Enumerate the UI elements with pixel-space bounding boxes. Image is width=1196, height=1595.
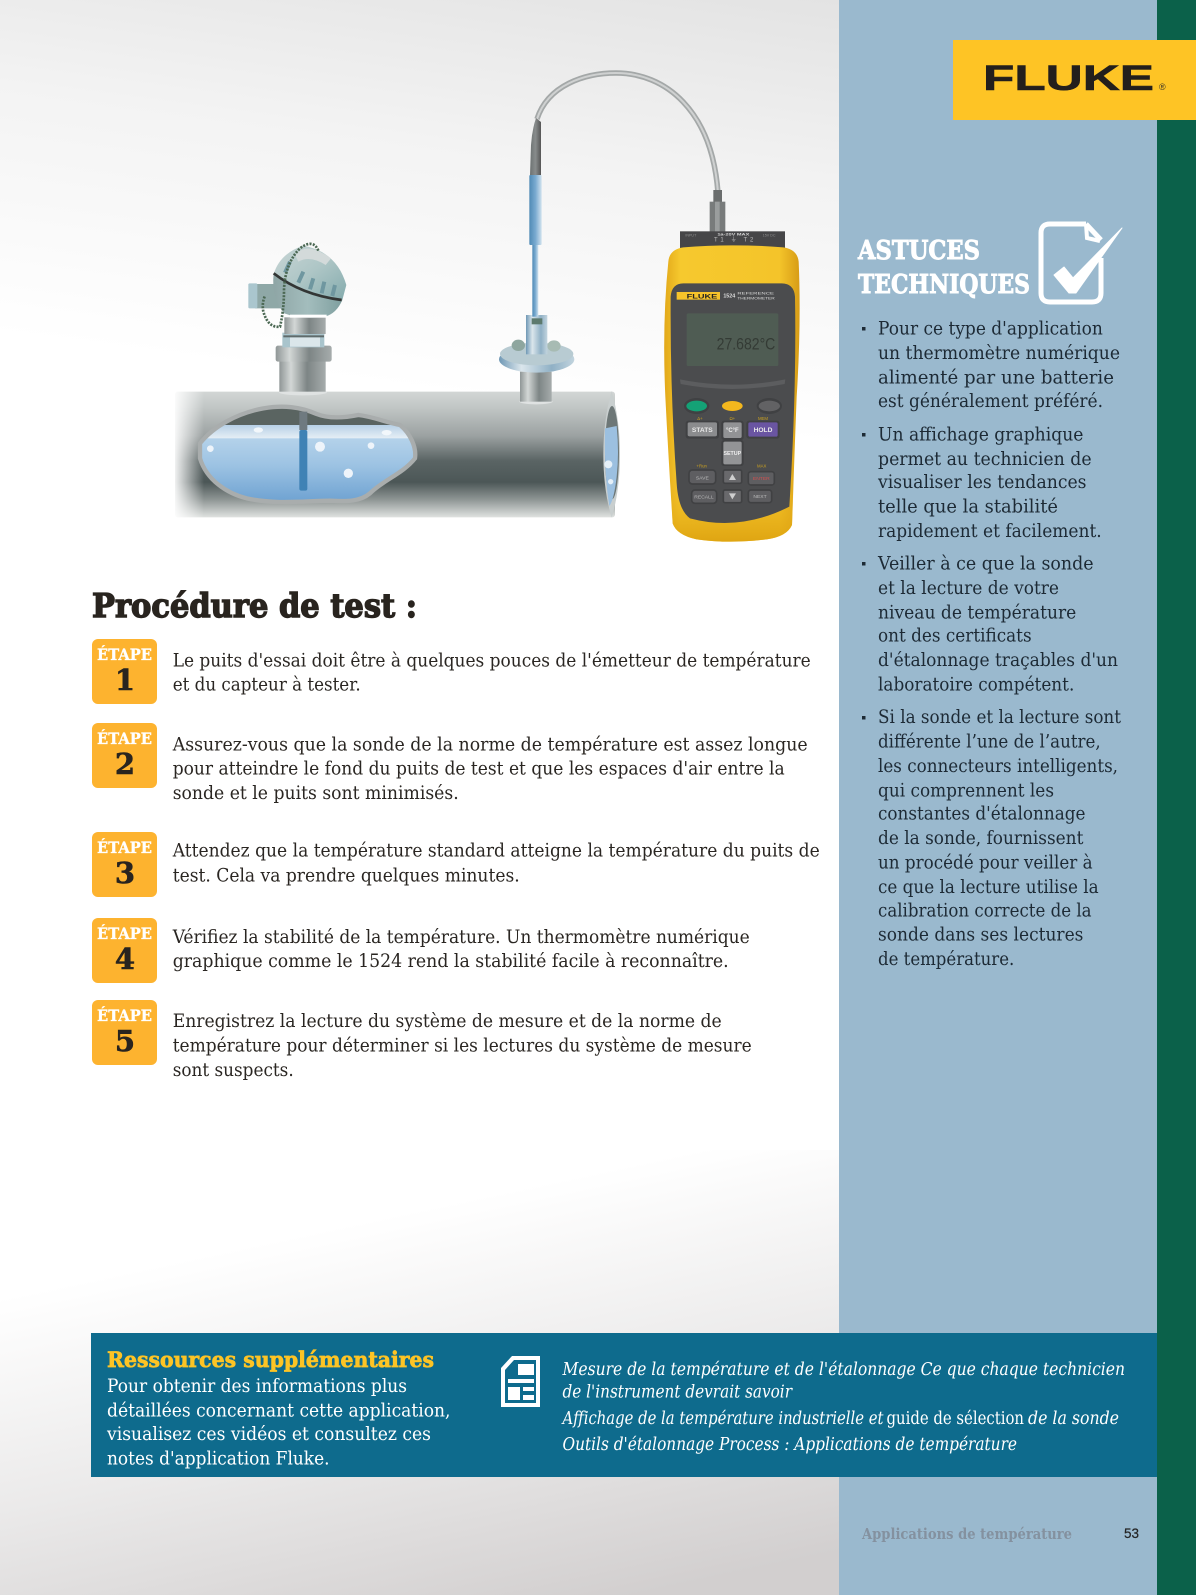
face divider [680,379,785,389]
step 2 badge [92,723,157,788]
title: Procédure de test : [92,586,417,625]
step 5 badge [92,1000,157,1065]
tip 1: alimenté par une batterie [878,367,1114,388]
icon: checklist document [1041,224,1122,302]
tip 2: rapidement et facilement. [878,521,1102,542]
dark face [671,283,795,523]
tip 1 [862,319,1120,412]
keypad: Ω+ [729,416,736,421]
step 3 text [172,840,820,886]
step 3 text: Attendez que la température standard atteigne la température du puits de [172,840,820,862]
tip 3 [862,554,1118,696]
tip 4: qui comprennent les [878,780,1054,801]
step 1 badge: 1 [115,663,135,697]
tip 4: Si la sonde et la lecture sont [878,707,1122,728]
tip 3: et la lecture de votre [878,578,1059,599]
illustration: digital thermometer [664,190,800,542]
tip 4: ce que la lecture utilise la [878,877,1099,898]
temperature transmitter [248,244,346,395]
step 2 text: Assurez-vous que la sonde de la norme de température est assez longue [172,734,808,756]
tip 3: niveau de température [878,602,1076,623]
probe cable [530,73,718,193]
heading: tips [857,236,1030,300]
tip 2: telle que la stabilité [878,497,1058,518]
probe flange and shaft [499,175,574,404]
resources description: notes d'application Fluke. [107,1448,330,1470]
tip 4: calibration correcte de la [878,900,1092,921]
tip 4: différente l’une de l’autre, [878,732,1101,752]
tip 4: de température. [878,949,1014,970]
logo: Fluke [953,40,1196,120]
brand strip: 1524 [723,294,735,300]
top connector bar [680,231,785,252]
tip 1: Pour ce type d'application [878,319,1103,340]
step 5 badge: ÉTAPE [97,1005,152,1025]
step 4 text: graphique comme le 1524 rend la stabilité facile à reconnaître. [173,951,729,972]
connector [710,190,725,232]
step 4 text: Vérifiez la stabilité de la température. Un thermomètre numérique [172,927,750,948]
step 5 badge: 5 [115,1024,135,1058]
keypad: °C°F [726,428,739,434]
step 5 text [173,1011,752,1081]
tip 2: visualiser les tendances [877,472,1086,493]
resources description: Pour obtenir des informations plus [107,1376,407,1397]
step 2 badge: 2 [115,747,135,781]
tip 2: Un affichage graphique [878,424,1083,445]
tip 3: laboratoire compétent. [878,674,1074,696]
tip 3: d'étalonnage traçables d'un [878,650,1118,671]
resource links: guide de sélection [886,1409,1024,1429]
resources heading: Ressources supplémentaires [107,1347,434,1372]
footer section label: Applications de température [861,1525,1072,1543]
tip 4 [862,707,1122,970]
step 5 text: sont suspects. [173,1060,294,1081]
step 4 badge: 4 [115,942,135,976]
resources description: détaillées concernant cette application, [107,1401,450,1422]
step 5 text: température pour déterminer si les lectures du système de mesure [173,1036,752,1056]
step 2 badge: ÉTAPE [97,728,152,748]
brand strip [677,291,775,301]
icon: document [501,1356,540,1407]
step 2 text: sonde et le puits sont minimisés. [173,783,459,804]
illustration: pipe with transmitter and probe [174,175,620,518]
cutaway with water [197,403,420,505]
step 4 badge: ÉTAPE [97,923,152,943]
step 2 text: pour atteindre le fond du puits de test et que les espaces d'air entre la [173,758,785,780]
page number: 53 [1124,1525,1139,1541]
keypad: MEM [758,416,768,421]
tip 4: les connecteurs intelligents, [878,756,1118,777]
tip 1: est généralement préféré. [878,391,1103,412]
keypad: MAX [757,463,766,468]
resource links: de la sonde [1028,1409,1119,1429]
step 1 text: et du capteur à tester. [173,674,361,696]
keypad [684,398,782,503]
resource links: Outils d'étalonnage Process : Applications de température [562,1435,1017,1455]
resources description [106,1376,450,1470]
step 4 text [172,927,750,972]
yellow case [664,245,800,542]
keypad: SETUP [723,451,742,457]
step 1 text [173,650,811,696]
step 3 badge [92,832,157,897]
step 3 badge: 3 [115,856,135,890]
top connector bar: 1a-20V MAX [717,231,750,236]
top connector bar: T1 ⏚ T2 [714,236,754,243]
keypad: Δ+ [697,416,703,421]
tip 4: un procédé pour veiller à [878,852,1093,874]
display: 27.682°C [717,334,775,353]
keypad: RECALL [694,494,714,500]
resources description: visualisez ces vidéos et consultez ces [106,1424,431,1445]
heading: tips: ASTUCES [857,236,980,266]
green side band [1157,0,1196,1595]
tip 4: de la sonde, fournissent [878,828,1084,849]
step 3 text: test. Cela va prendre quelques minutes. [173,866,520,886]
heading: tips: TECHNIQUES [858,270,1030,300]
tip 2 [862,424,1102,542]
resource links: Mesure de la température et de l'étalonnage Ce que chaque technicien [562,1360,1125,1380]
keypad: ENTER [753,476,770,482]
resource links: de l'instrument devrait savoir [562,1383,793,1403]
top connector bar: INPUT [685,234,697,238]
brand strip: FLUKE [687,293,718,300]
logo: Fluke: ® [1159,82,1166,92]
step 4 badge [92,918,157,983]
tip 3: Veiller à ce que la sonde [877,554,1094,574]
panel: tips background [839,0,1157,1595]
step 1 text: Le puits d'essai doit être à quelques pouces de l'émetteur de température [173,650,811,672]
keypad: HOLD [754,427,773,434]
tip 2: permet au technicien de [878,449,1092,470]
keypad: STATS [692,427,713,434]
display [687,313,778,366]
resource links [561,1360,1125,1455]
tip 1: un thermomètre numérique [878,343,1120,364]
step 1 badge [92,639,157,704]
brand strip: REFERENCE [737,291,775,296]
panel: additional resources [91,1333,1157,1477]
step 2 text [172,734,808,804]
keypad: NEXT [753,494,767,500]
tip 3: ont des certificats [878,626,1032,647]
logo: Fluke: FLUKE [983,59,1154,98]
pipe [174,391,620,518]
step 3 badge: ÉTAPE [97,837,152,857]
step 5 text: Enregistrez la lecture du système de mesure et de la norme de [173,1011,722,1032]
keypad: +Run [696,463,707,468]
brand strip: THERMOMETER [737,296,775,301]
keypad: SAVE [696,475,709,481]
top connector bar: 15V DC [763,234,776,238]
tip 4: sonde dans ses lectures [878,925,1083,946]
resource links: Affichage de la température industrielle et [561,1409,884,1429]
step 1 badge: ÉTAPE [97,644,152,664]
tip 4: constantes d'étalonnage [878,804,1086,825]
